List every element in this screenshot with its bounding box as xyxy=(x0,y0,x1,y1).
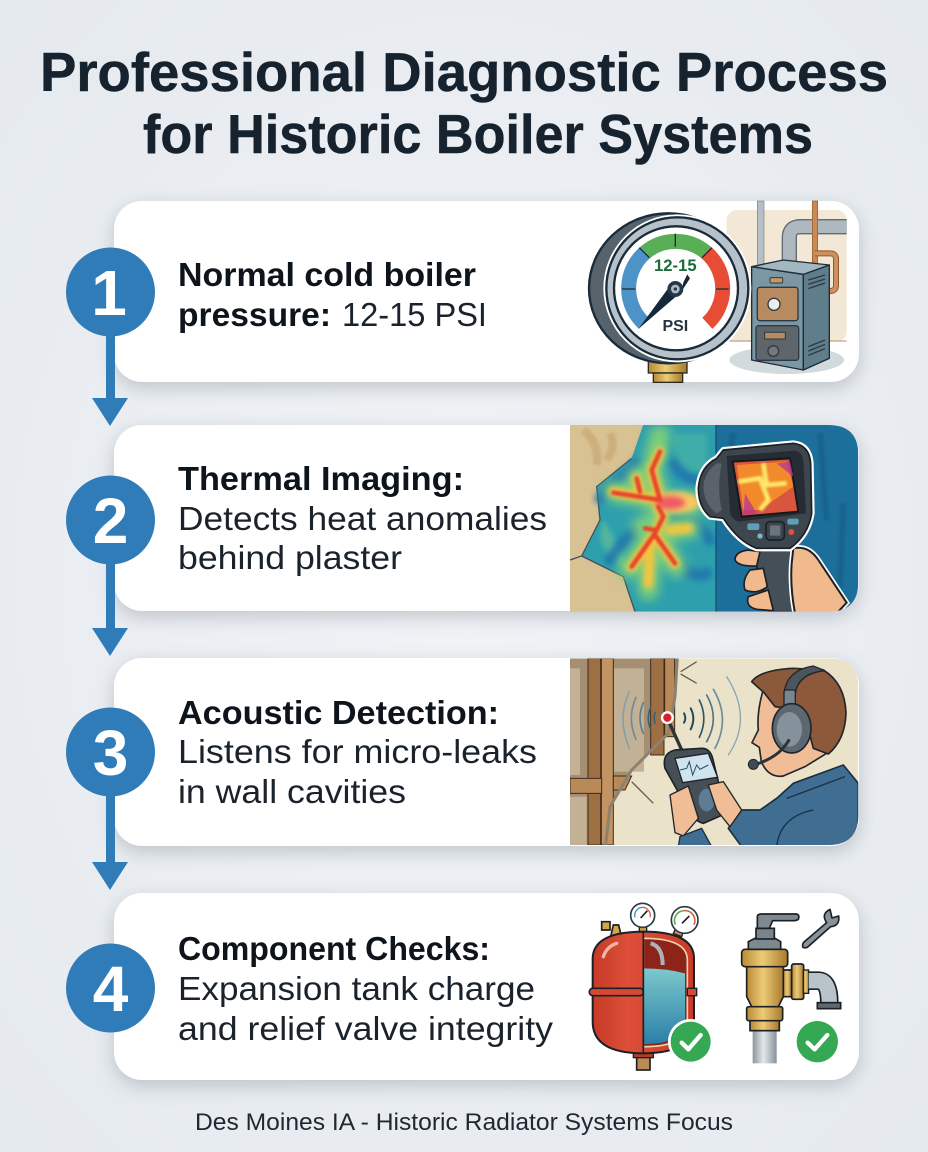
step 1 text xyxy=(178,256,487,333)
hand and grip xyxy=(752,547,795,612)
icon: boiler and pressure gauge: 12-15 xyxy=(654,256,697,275)
panel: step 4 card xyxy=(114,893,859,1080)
camera body xyxy=(698,443,812,548)
step 2 text: Detects heat anomalies xyxy=(178,500,547,537)
man xyxy=(728,765,858,847)
step 4 text: Expansion tank charge xyxy=(178,970,535,1007)
step 4 text xyxy=(178,930,554,1047)
step 3 text: Listens for micro-leaks xyxy=(178,733,537,770)
step 2 text xyxy=(178,460,547,576)
arrow: step 1 to 2 xyxy=(92,330,128,426)
step badge 4: 4 xyxy=(93,953,129,1025)
icon: expansion tank with check xyxy=(589,903,713,1070)
panel: step 2 card xyxy=(114,425,859,613)
step badge 3: 3 xyxy=(93,717,128,789)
panel: step 1 card xyxy=(114,201,859,382)
arrow: step 3 to 4 xyxy=(92,790,128,890)
step 2 text: behind plaster xyxy=(178,539,402,576)
check badge xyxy=(668,1019,713,1064)
step 3 text xyxy=(178,694,537,810)
image: thermal camera scanning wall xyxy=(570,425,858,613)
title: Professional Diagnostic Process xyxy=(40,41,888,103)
footer: Des Moines IA - Historic Radiator Systems Focus xyxy=(195,1109,733,1136)
icon: boiler and pressure gauge xyxy=(589,201,847,382)
title xyxy=(40,41,888,165)
step 1 text: 12-15 PSI xyxy=(342,296,487,333)
title: for Historic Boiler Systems xyxy=(143,103,813,165)
icon: relief valve and wrench with check xyxy=(742,909,841,1063)
step 1 text: pressure: xyxy=(178,296,331,333)
step badge 1 xyxy=(66,248,155,336)
step 1 text: Normal cold boiler xyxy=(178,256,476,293)
panel: step 3 card xyxy=(114,658,859,847)
step badge 4 xyxy=(66,944,155,1032)
step 2 text: Thermal Imaging: xyxy=(178,460,464,497)
step badge 2 xyxy=(66,476,155,564)
step 4 text: and relief valve integrity xyxy=(178,1010,554,1047)
check badge xyxy=(797,1021,838,1062)
step badge 3 xyxy=(66,708,155,796)
step 3 text: Acoustic Detection: xyxy=(178,694,499,731)
icon: boiler and pressure gauge: PSI xyxy=(662,318,688,335)
step badge 2: 2 xyxy=(93,485,128,557)
step 4 text: Component Checks: xyxy=(178,930,490,967)
arrow: step 2 to 3 xyxy=(92,558,128,656)
step badge 1: 1 xyxy=(91,257,127,329)
step 3 text: in wall cavities xyxy=(178,773,406,810)
detector and hands xyxy=(664,748,726,823)
image: technician using acoustic detector xyxy=(570,658,858,847)
